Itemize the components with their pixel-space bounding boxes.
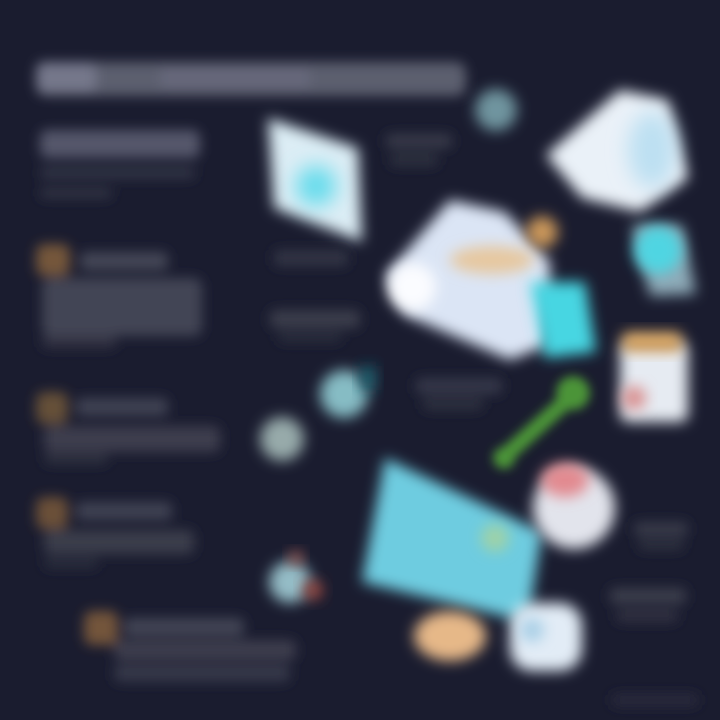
title <box>36 62 466 96</box>
icon: top right cloud <box>546 90 688 212</box>
illustration: laptop screen <box>362 458 542 622</box>
arrow: green wrench <box>493 376 590 469</box>
footer mark <box>612 694 698 706</box>
icon: orange base of laptop <box>414 611 486 661</box>
icon: document with teal center <box>268 118 362 242</box>
text block: center captions <box>270 250 360 342</box>
text block: mid caption <box>416 378 502 410</box>
icon: white rounded tile <box>510 603 582 671</box>
icon: small teal circle <box>320 366 376 418</box>
left column: intro heading and text <box>40 130 200 198</box>
text block: top center caption <box>386 134 452 166</box>
icon: pink and white circle <box>533 463 615 549</box>
illustration: central cloud with orange and teal <box>386 200 596 360</box>
icon: small bottom teal and red <box>269 551 323 603</box>
icon: teal tile right <box>632 225 696 296</box>
icon: small grey circle <box>260 417 304 461</box>
list item 3 <box>36 497 194 568</box>
icon: calendar card right <box>620 332 688 422</box>
icon: small teal dot near title <box>475 89 517 131</box>
list item 4 <box>84 611 296 682</box>
text block: lower right captions <box>610 522 688 622</box>
list item 2 <box>36 392 220 464</box>
list item 1 <box>36 244 202 348</box>
